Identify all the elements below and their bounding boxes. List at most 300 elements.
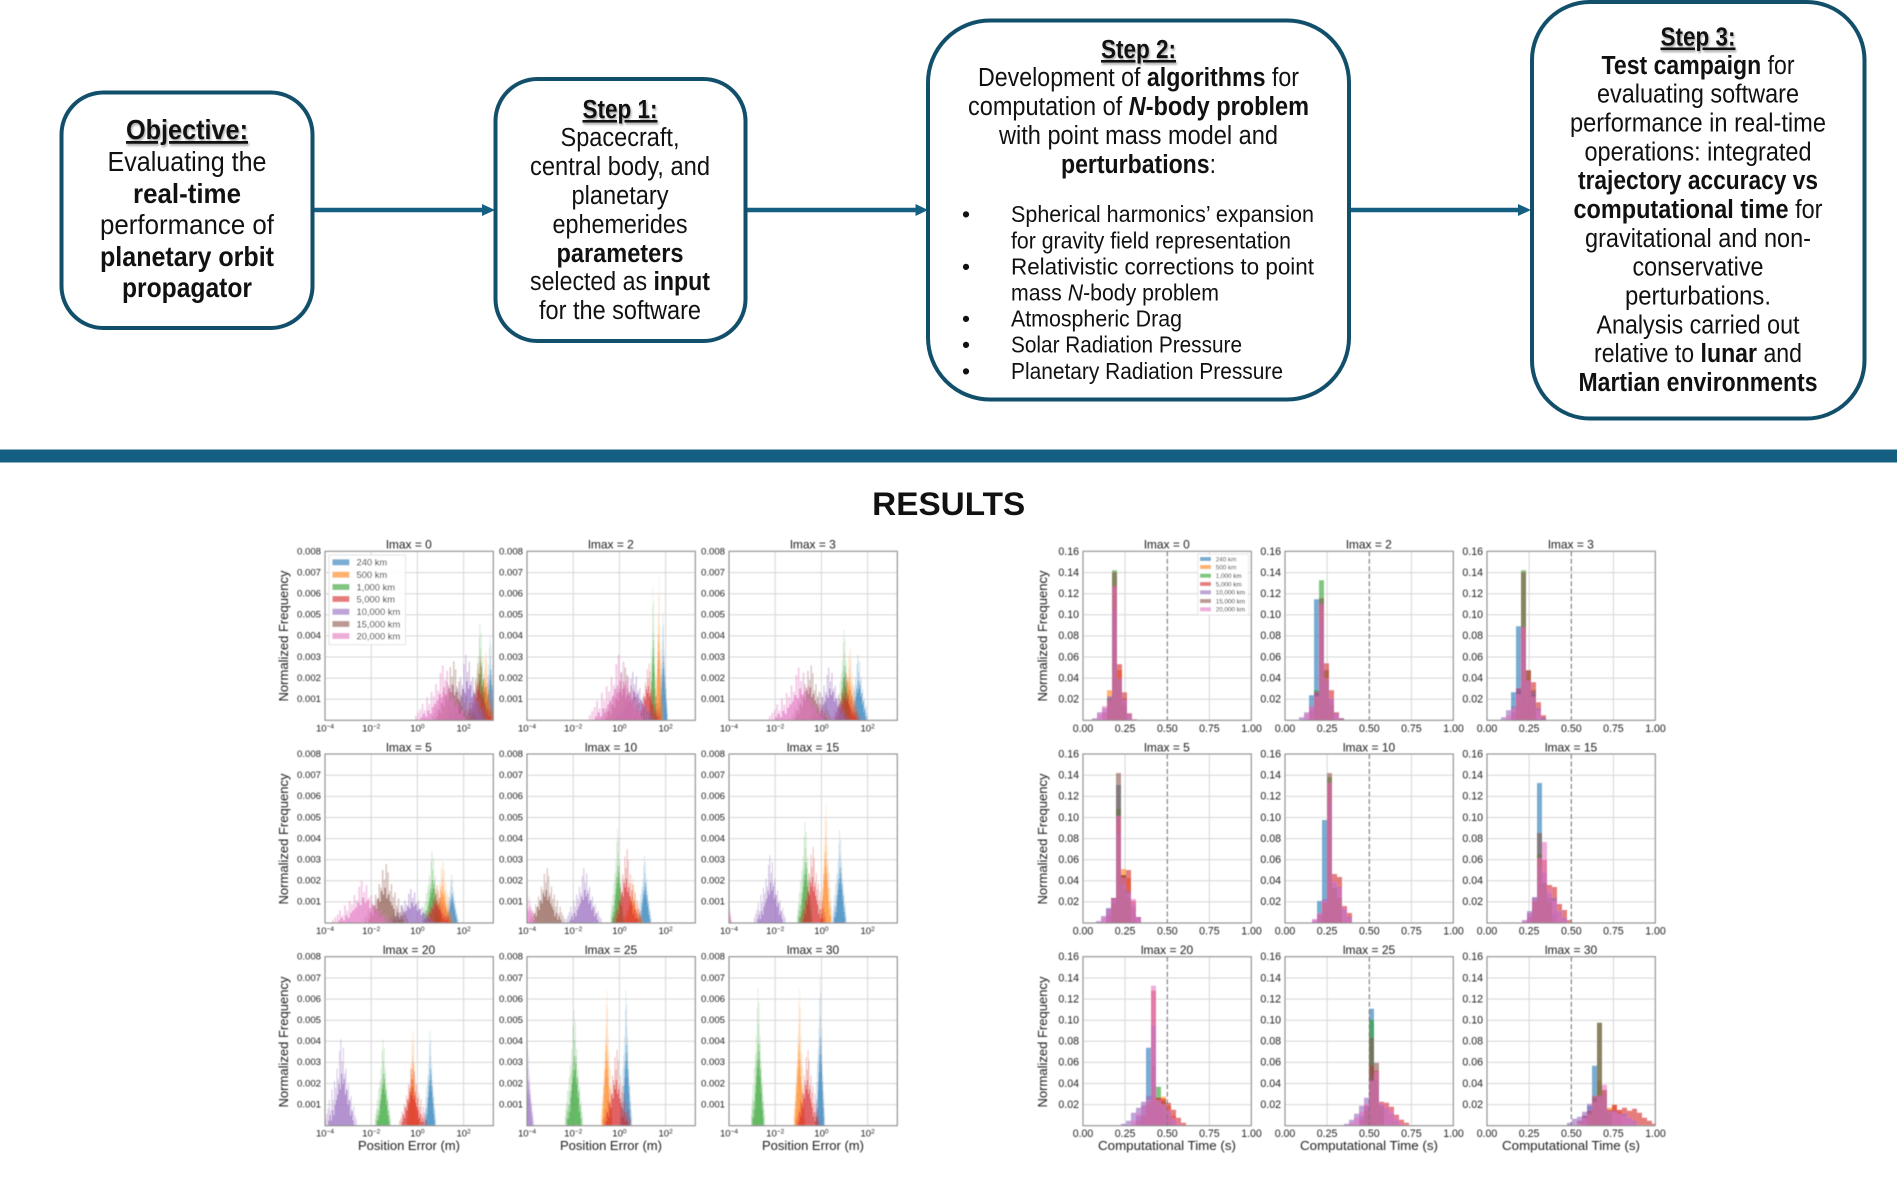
chart: position error lmax 3: 0	[825, 723, 829, 730]
chart: computational time lmax 2: 0.10	[1260, 609, 1281, 621]
chart: computational time lmax 5: 0.08	[1058, 833, 1079, 845]
chart: position error lmax 20: 0.005	[297, 1015, 321, 1026]
chart: position error lmax 15: 10	[860, 926, 871, 937]
chart: position error lmax 3	[701, 538, 897, 734]
chart: position error lmax 10: 10	[564, 926, 575, 937]
panel: step 1	[496, 79, 746, 341]
chart: computational time lmax 2: 0.04	[1260, 672, 1281, 684]
legend: altitudes	[1198, 554, 1248, 615]
chart: computational time lmax 5: 0.02	[1058, 896, 1079, 908]
legend: altitudes: 240 km	[356, 557, 387, 568]
panel: step 1: Step 1:	[582, 96, 658, 124]
chart: position error lmax 20: 0.004	[297, 1036, 322, 1047]
chart: computational time lmax 25: Computational Time (s)	[1300, 1138, 1438, 1153]
chart: position error lmax 0: 10	[410, 723, 421, 734]
panel: step 3: operations: integrated	[1584, 138, 1812, 166]
chart: position error lmax 3: 0.007	[701, 567, 725, 578]
chart: position error lmax 15: 0.004	[701, 833, 726, 844]
legend: altitudes: 1,000 km	[1216, 573, 1242, 580]
chart: computational time lmax 15: 0.12	[1462, 791, 1483, 803]
chart: position error lmax 10: 10	[658, 926, 669, 937]
arrow: objective to step 1	[314, 204, 495, 216]
chart: computational time lmax 10: 0.12	[1260, 791, 1281, 803]
chart: position error lmax 15: 0.008	[701, 749, 725, 760]
chart: computational time lmax 5: lmax = 5	[1144, 740, 1190, 754]
chart: position error lmax 20: 0.002	[297, 1078, 321, 1089]
chart: position error lmax 30: 10	[814, 1129, 825, 1140]
panel: objective: Evaluating the	[108, 146, 266, 177]
chart: position error lmax 20: 0.003	[297, 1057, 321, 1068]
panel: step 3: computational time for	[1574, 196, 1823, 224]
chart: computational time lmax 3: 0.00	[1477, 723, 1497, 735]
panel: step 2: perturbations:	[1061, 151, 1216, 179]
chart: position error lmax 30: Position Error (m)	[762, 1138, 864, 1153]
chart: computational time lmax 2: 1.00	[1443, 723, 1464, 735]
chart: computational time lmax 3: 0.08	[1462, 630, 1483, 642]
chart: position error lmax 15: 0	[825, 926, 829, 933]
chart: position error lmax 3: 10	[814, 723, 825, 734]
chart: computational time lmax 30: 0.75	[1603, 1128, 1624, 1140]
chart: position error lmax 15: 10	[814, 926, 825, 937]
chart: position error lmax 20: 0.006	[297, 994, 321, 1005]
chart: computational time lmax 3: 0.06	[1462, 651, 1483, 663]
panel: step 1: Spacecraft,	[560, 124, 680, 152]
chart: computational time lmax 3: 0.25	[1519, 723, 1540, 735]
chart: position error lmax 25: 2	[669, 1129, 673, 1136]
chart: computational time lmax 15: 0.10	[1462, 812, 1483, 824]
chart: position error lmax 5: 0.002	[297, 876, 321, 887]
legend: altitudes: 20,000 km	[356, 630, 400, 641]
chart: computational time lmax 2: lmax = 2	[1346, 538, 1392, 552]
chart: computational time lmax 0: 0.10	[1058, 609, 1079, 621]
chart: position error lmax 15: 0.006	[701, 791, 725, 802]
chart: position error lmax 30: 10	[860, 1129, 871, 1140]
chart: position error lmax 10	[499, 740, 695, 937]
chart: computational time lmax 25: 0.75	[1401, 1128, 1422, 1140]
chart: computational time lmax 3: 0.50	[1561, 723, 1582, 735]
chart: position error lmax 3: lmax = 3	[790, 538, 836, 552]
chart: computational time lmax 0: 1.00	[1241, 723, 1262, 735]
chart: computational time lmax 15: 0.25	[1519, 926, 1540, 938]
chart: position error lmax 2: 0	[623, 723, 627, 730]
panel: step 3: gravitational and non-	[1585, 225, 1811, 253]
chart: computational time lmax 20: 0.00	[1073, 1128, 1093, 1140]
chart: computational time lmax 0: 0.02	[1058, 693, 1079, 705]
chart: computational time lmax 2: 0.50	[1359, 723, 1380, 735]
chart: position error lmax 30: 0.007	[701, 973, 725, 984]
chart: position error lmax 30: −2	[777, 1129, 785, 1136]
chart: position error lmax 30: 10	[766, 1129, 777, 1140]
chart: position error lmax 25: 0.001	[499, 1099, 523, 1110]
chart: computational time lmax 10	[1260, 740, 1464, 938]
chart: computational time lmax 2: 0.75	[1401, 723, 1422, 735]
chart: computational time lmax 15: 0.75	[1603, 926, 1624, 938]
chart: computational time lmax 5: 0.50	[1157, 926, 1178, 938]
chart: position error lmax 0: 10	[316, 723, 327, 734]
chart: computational time lmax 20: 0.50	[1157, 1128, 1178, 1140]
chart: computational time lmax 2: 0.02	[1260, 693, 1281, 705]
legend: altitudes: 15,000 km	[1216, 598, 1245, 605]
chart: position error lmax 25: Position Error (m)	[560, 1138, 662, 1153]
legend: altitudes: 500 km	[356, 569, 387, 580]
chart: computational time lmax 10: 0.00	[1275, 926, 1295, 938]
chart: computational time lmax 25: 0.00	[1275, 1128, 1295, 1140]
chart: position error lmax 20: Position Error (m)	[358, 1138, 460, 1153]
chart: position error lmax 0: 0.001	[297, 694, 321, 705]
chart: computational time lmax 0: 0.14	[1058, 567, 1079, 579]
chart: computational time lmax 30: 0.12	[1462, 993, 1483, 1005]
chart: position error lmax 30: 0	[825, 1129, 829, 1136]
chart: position error lmax 5: 10	[362, 926, 373, 937]
chart: position error lmax 0: 0	[421, 723, 425, 730]
chart: position error lmax 2: 0.001	[499, 694, 523, 705]
chart: computational time lmax 2: 0.14	[1260, 567, 1281, 579]
chart: position error lmax 5: 10	[316, 926, 327, 937]
chart: position error lmax 15: 10	[766, 926, 777, 937]
chart: computational time lmax 25: 0.25	[1317, 1128, 1338, 1140]
chart: computational time lmax 15: 0.14	[1462, 770, 1483, 782]
chart: computational time lmax 30: 0.14	[1462, 972, 1483, 984]
chart: position error lmax 5: 10	[410, 926, 421, 937]
list: perturbation models: Spherical harmonics’ expansion	[1011, 201, 1314, 227]
legend: altitudes: 500 km	[1216, 564, 1236, 571]
chart: computational time lmax 5: 0.14	[1058, 770, 1079, 782]
chart: computational time lmax 20: Computational Time (s)	[1098, 1138, 1236, 1153]
chart: position error lmax 0: 10	[362, 723, 373, 734]
chart: computational time lmax 25: 0.02	[1260, 1099, 1281, 1111]
chart: computational time lmax 10: 0.08	[1260, 833, 1281, 845]
chart: position error lmax 30: 2	[871, 1129, 875, 1136]
panel: step 1: parameters	[556, 240, 684, 268]
axis label: normalized frequency row 3: Normalized Frequency	[1036, 976, 1050, 1108]
chart: position error lmax 10: 0.008	[499, 749, 523, 760]
chart: computational time lmax 25: 0.50	[1359, 1128, 1380, 1140]
chart: position error lmax 30	[701, 943, 897, 1153]
chart: position error lmax 0: −2	[373, 723, 381, 730]
chart: computational time lmax 10: 0.75	[1401, 926, 1422, 938]
chart: computational time lmax 2: 0.06	[1260, 651, 1281, 663]
chart: position error lmax 0	[297, 538, 496, 734]
chart: computational time lmax 0: 0.25	[1115, 723, 1136, 735]
chart: position error lmax 0: 10	[456, 723, 467, 734]
chart: computational time lmax 30: lmax = 30	[1545, 943, 1598, 957]
chart: position error lmax 20: −2	[373, 1129, 381, 1136]
chart: computational time lmax 20: 0.06	[1058, 1057, 1079, 1069]
chart: position error lmax 10: 2	[669, 926, 673, 933]
chart: position error lmax 30: 0.002	[701, 1078, 725, 1089]
chart: computational time lmax 2: 0.08	[1260, 630, 1281, 642]
chart: position error lmax 20: 2	[467, 1129, 471, 1136]
axis label: normalized frequency row 2: Normalized Frequency	[1036, 773, 1050, 904]
chart: computational time lmax 20: 0.10	[1058, 1014, 1079, 1026]
chart: position error lmax 3: 0.003	[701, 652, 725, 663]
chart: computational time lmax 3: lmax = 3	[1548, 538, 1594, 552]
chart: position error lmax 25	[499, 943, 695, 1153]
legend: altitudes: 15,000 km	[356, 618, 400, 629]
chart: position error lmax 5: 0.007	[297, 770, 321, 781]
chart: position error lmax 5: 10	[456, 926, 467, 937]
panel: step 3: Martian environments	[1578, 369, 1818, 397]
chart: position error lmax 30: 0.008	[701, 952, 725, 963]
axis label: normalized frequency row 2: Normalized Frequency	[277, 773, 291, 904]
chart: position error lmax 20: 10	[362, 1129, 373, 1140]
panel: objective: planetary orbit	[100, 241, 274, 272]
chart: position error lmax 5: 0.003	[297, 854, 321, 866]
chart: computational time lmax 3: 0.16	[1462, 546, 1483, 558]
chart: computational time lmax 3: 0.04	[1462, 672, 1483, 684]
chart: computational time lmax 25: 1.00	[1443, 1128, 1464, 1140]
chart: position error lmax 30: −4	[731, 1129, 738, 1136]
chart: computational time lmax 30: 0.50	[1561, 1128, 1582, 1140]
chart: position error lmax 2	[499, 538, 695, 734]
chart: computational time lmax 30: 0.02	[1462, 1099, 1483, 1111]
chart: position error lmax 2: 10	[612, 723, 623, 734]
chart: position error lmax 20: lmax = 20	[383, 943, 436, 957]
chart: computational time lmax 10: lmax = 10	[1343, 740, 1396, 754]
chart: computational time lmax 0: 0.08	[1058, 630, 1079, 642]
chart: position error lmax 10: 0.006	[499, 791, 523, 802]
chart: computational time lmax 0: 0.00	[1073, 723, 1093, 735]
chart: position error lmax 5: 2	[467, 926, 471, 933]
legend: altitudes	[329, 555, 406, 645]
chart: computational time lmax 2	[1260, 538, 1464, 735]
chart: computational time lmax 15	[1462, 740, 1666, 938]
chart: computational time lmax 10: 0.16	[1260, 748, 1281, 760]
panel: objective: performance of	[100, 209, 274, 240]
chart: position error lmax 10: 0.002	[499, 876, 523, 887]
chart: position error lmax 0: −4	[327, 723, 334, 730]
chart: computational time lmax 3: 0.10	[1462, 609, 1483, 621]
panel: step 2: Step 2:	[1101, 36, 1176, 64]
chart: position error lmax 0: 0.006	[297, 588, 321, 599]
axis label: normalized frequency row 1: Normalized Frequency	[277, 570, 291, 702]
chart: computational time lmax 10: 0.50	[1359, 926, 1380, 938]
chart: computational time lmax 10: 0.04	[1260, 875, 1281, 887]
arrow: step 2 to step 3	[1350, 204, 1531, 216]
chart: position error lmax 20: 0.007	[297, 973, 321, 984]
chart: position error lmax 2: 0.002	[499, 673, 523, 684]
chart: position error lmax 25: 10	[564, 1129, 575, 1140]
chart: position error lmax 25: 10	[658, 1129, 669, 1140]
chart: position error lmax 5: 0.001	[297, 897, 321, 908]
chart: computational time lmax 20	[1058, 943, 1262, 1153]
chart: computational time lmax 5: 0.25	[1115, 926, 1136, 938]
panel: step 2: Development of algorithms for	[978, 64, 1299, 92]
list: perturbation models: for gravity field representation	[1011, 228, 1291, 254]
chart: position error lmax 10: 0.003	[499, 854, 523, 866]
chart: computational time lmax 3: 0.14	[1462, 567, 1483, 579]
chart: position error lmax 5: −4	[327, 926, 334, 933]
list: perturbation models: •	[962, 306, 970, 332]
chart: position error lmax 10: −4	[529, 926, 536, 933]
chart: computational time lmax 25: 0.16	[1260, 951, 1281, 963]
chart: computational time lmax 25	[1260, 943, 1464, 1153]
chart: computational time lmax 25: 0.08	[1260, 1036, 1281, 1048]
chart: position error lmax 20: 10	[456, 1129, 467, 1140]
panel: step 1: ephemerides	[552, 211, 688, 239]
list: perturbation models: Planetary Radiation Pressure	[1011, 358, 1283, 384]
chart: computational time lmax 25: 0.04	[1260, 1078, 1281, 1090]
chart: position error lmax 3: 0.004	[701, 631, 726, 642]
chart: computational time lmax 15: lmax = 15	[1545, 740, 1598, 754]
chart: position error lmax 15: 0.005	[701, 812, 725, 823]
chart: position error lmax 3: 0.001	[701, 694, 725, 705]
chart: computational time lmax 30: Computational Time (s)	[1502, 1138, 1640, 1153]
panel: objective: Objective:	[126, 114, 248, 145]
chart: computational time lmax 20: 0.02	[1058, 1099, 1079, 1111]
chart: computational time lmax 0	[1058, 538, 1262, 735]
panel: objective	[62, 92, 312, 328]
chart: position error lmax 20	[297, 943, 493, 1153]
chart: computational time lmax 10: 1.00	[1443, 926, 1464, 938]
chart: computational time lmax 5: 0.04	[1058, 875, 1079, 887]
chart: computational time lmax 3: 0.02	[1462, 693, 1483, 705]
chart: computational time lmax 10: 0.02	[1260, 896, 1281, 908]
chart: computational time lmax 10: 0.25	[1317, 926, 1338, 938]
chart: computational time lmax 20: 0.12	[1058, 993, 1079, 1005]
chart: position error lmax 25: 10	[518, 1129, 529, 1140]
chart: position error lmax 2: 0.004	[499, 631, 524, 642]
legend: altitudes: 240 km	[1216, 556, 1236, 563]
chart: computational time lmax 20: 0.16	[1058, 951, 1079, 963]
chart: position error lmax 30: 0.004	[701, 1036, 726, 1047]
chart: computational time lmax 30: 0.00	[1477, 1128, 1497, 1140]
chart: position error lmax 2: 0.007	[499, 567, 523, 578]
panel: step 3	[1532, 2, 1864, 418]
chart: computational time lmax 15: 0.04	[1462, 875, 1483, 887]
chart: position error lmax 20: 0.001	[297, 1099, 321, 1110]
chart: computational time lmax 2: 0.25	[1317, 723, 1338, 735]
chart: position error lmax 25: 0.002	[499, 1078, 523, 1089]
list: perturbation models: Solar Radiation Pressure	[1011, 332, 1242, 358]
chart: position error lmax 10: 0.001	[499, 897, 523, 908]
panel: step 2	[928, 20, 1349, 400]
chart: computational time lmax 5: 0.16	[1058, 748, 1079, 760]
chart: position error lmax 30: 10	[720, 1129, 731, 1140]
chart: position error lmax 0: 0.004	[297, 631, 322, 642]
chart: computational time lmax 10: 0.14	[1260, 770, 1281, 782]
chart: computational time lmax 15: 1.00	[1645, 926, 1666, 938]
legend: altitudes: 10,000 km	[1216, 590, 1245, 597]
legend: altitudes: 1,000 km	[356, 581, 395, 592]
chart: computational time lmax 25: 0.06	[1260, 1057, 1281, 1069]
chart: position error lmax 3: 10	[720, 723, 731, 734]
chart: computational time lmax 0: 0.16	[1058, 546, 1079, 558]
chart: computational time lmax 15: 0.50	[1561, 926, 1582, 938]
chart: position error lmax 2: −4	[529, 723, 536, 730]
chart: computational time lmax 20: 0.08	[1058, 1036, 1079, 1048]
chart: computational time lmax 30: 0.08	[1462, 1036, 1483, 1048]
chart: position error lmax 3: −2	[777, 723, 785, 730]
chart: computational time lmax 15: 0.06	[1462, 854, 1483, 866]
chart: computational time lmax 20: 0.25	[1115, 1128, 1136, 1140]
chart: position error lmax 15: 0.007	[701, 770, 725, 781]
axis label: normalized frequency row 1: Normalized Frequency	[1036, 570, 1050, 702]
chart: position error lmax 30: 0.003	[701, 1057, 725, 1068]
chart: position error lmax 0: 0.003	[297, 652, 321, 663]
chart: position error lmax 2: 10	[518, 723, 529, 734]
legend: altitudes: 5,000 km	[356, 593, 395, 604]
chart: position error lmax 2: lmax = 2	[588, 538, 634, 552]
chart group: position error histograms	[277, 538, 897, 1153]
chart: position error lmax 10: 0.007	[499, 770, 523, 781]
panel: step 1: for the software	[539, 297, 701, 325]
chart: position error lmax 2: 2	[669, 723, 673, 730]
chart: position error lmax 5: lmax = 5	[386, 740, 432, 754]
chart: position error lmax 0: 2	[467, 723, 471, 730]
chart: position error lmax 15: 10	[720, 926, 731, 937]
chart: computational time lmax 30	[1462, 943, 1666, 1153]
chart: computational time lmax 20: 0.04	[1058, 1078, 1079, 1090]
chart: computational time lmax 0: 0.04	[1058, 672, 1079, 684]
chart: position error lmax 15	[701, 740, 897, 937]
chart: position error lmax 10: 0	[623, 926, 627, 933]
chart: computational time lmax 0: 0.12	[1058, 588, 1079, 600]
chart: position error lmax 20: 0.008	[297, 952, 321, 963]
chart: position error lmax 3: 0.006	[701, 588, 725, 599]
chart: position error lmax 20: 0	[421, 1129, 425, 1136]
chart: position error lmax 15: lmax = 15	[787, 740, 840, 754]
chart: position error lmax 25: 0.008	[499, 952, 523, 963]
chart: position error lmax 20: 10	[316, 1129, 327, 1140]
chart: position error lmax 15: 0.001	[701, 897, 725, 908]
chart: position error lmax 2: 10	[564, 723, 575, 734]
chart: position error lmax 30: 0.001	[701, 1099, 725, 1110]
chart: computational time lmax 5: 0.10	[1058, 812, 1079, 824]
chart: position error lmax 3: 2	[871, 723, 875, 730]
chart: position error lmax 10: lmax = 10	[585, 740, 638, 754]
chart: position error lmax 5: 0.008	[297, 749, 321, 760]
chart: computational time lmax 15: 0.16	[1462, 748, 1483, 760]
chart: position error lmax 20: 10	[410, 1129, 421, 1140]
list: perturbation models: •	[962, 254, 970, 280]
chart: position error lmax 25: 0.005	[499, 1015, 523, 1026]
chart: position error lmax 2: 10	[658, 723, 669, 734]
list: perturbation models: •	[962, 332, 970, 358]
chart: computational time lmax 15: 0.08	[1462, 833, 1483, 845]
chart: position error lmax 5: 0	[421, 926, 425, 933]
chart: position error lmax 3: 0.002	[701, 673, 725, 684]
panel: step 2: with point mass model and	[998, 122, 1278, 150]
chart: computational time lmax 30: 0.25	[1519, 1128, 1540, 1140]
chart group: computational time histograms	[1036, 538, 1666, 1153]
panel: step 1: selected as input	[530, 268, 710, 296]
chart: position error lmax 25: 0.007	[499, 973, 523, 984]
legend: altitudes: 10,000 km	[356, 606, 400, 617]
panel: step 3: Test campaign for	[1602, 52, 1795, 80]
chart: position error lmax 15: −2	[777, 926, 785, 933]
chart: position error lmax 10: 10	[518, 926, 529, 937]
chart: computational time lmax 20: 0.75	[1199, 1128, 1220, 1140]
chart: computational time lmax 0: 0.75	[1199, 723, 1220, 735]
chart: computational time lmax 5: 0.06	[1058, 854, 1079, 866]
chart: position error lmax 5	[297, 740, 493, 937]
chart: position error lmax 25: 0.003	[499, 1057, 523, 1068]
chart: position error lmax 0: 0.007	[297, 567, 321, 578]
chart: position error lmax 30: lmax = 30	[787, 943, 840, 957]
chart: position error lmax 2: −2	[575, 723, 583, 730]
panel: step 3: performance in real-time	[1570, 110, 1826, 138]
list: perturbation models	[962, 201, 1315, 384]
chart: computational time lmax 3	[1462, 538, 1666, 735]
chart: computational time lmax 10: 0.10	[1260, 812, 1281, 824]
chart: position error lmax 25: 10	[612, 1129, 623, 1140]
chart: position error lmax 3: 10	[860, 723, 871, 734]
chart: position error lmax 5: 0.004	[297, 833, 322, 844]
chart: computational time lmax 30: 0.10	[1462, 1014, 1483, 1026]
chart: computational time lmax 20: lmax = 20	[1141, 943, 1194, 957]
chart: computational time lmax 30: 0.16	[1462, 951, 1483, 963]
